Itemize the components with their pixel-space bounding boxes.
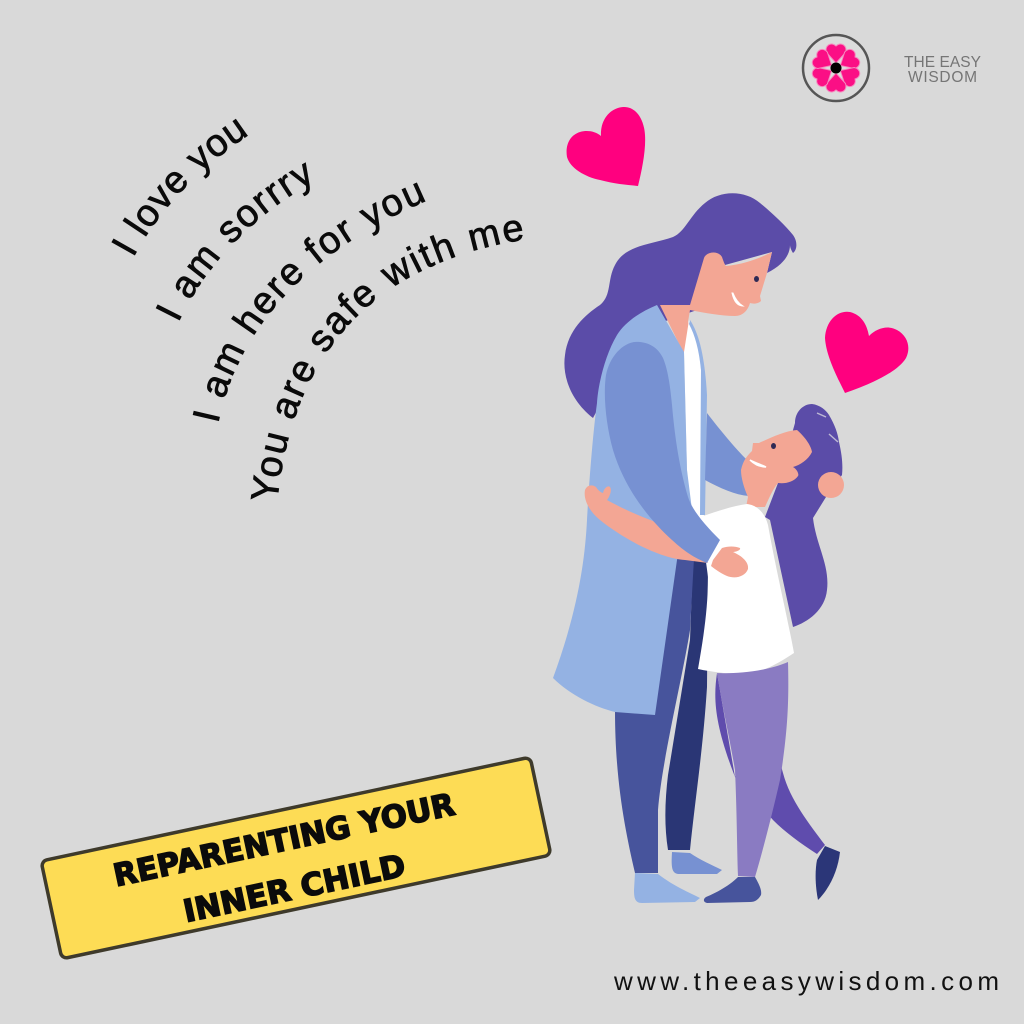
mother back shoe (672, 852, 722, 874)
mother cardigan right flap (689, 320, 707, 515)
curved affirmations text (111, 118, 523, 500)
icon: right heart (825, 312, 908, 393)
mother front leg (615, 558, 694, 873)
banner title text (110, 787, 468, 943)
child ear (818, 472, 844, 498)
mother back leg (665, 558, 708, 850)
mother front sleeve (605, 342, 720, 563)
mother right sleeve (705, 413, 749, 496)
child smile (750, 460, 766, 467)
child back foot (816, 846, 840, 900)
illustration: mother and child hugging (553, 193, 844, 903)
mother smile (732, 293, 743, 306)
logo wordmark: THE EASY (904, 54, 981, 71)
mother front shoe (634, 873, 700, 903)
child hair strand highlights (817, 413, 838, 442)
title banner (41, 757, 551, 959)
icon: flower badge (803, 35, 869, 101)
mother skin: face and neck (660, 252, 772, 352)
mother hand (711, 546, 748, 577)
affirmation: I love you: I love you (111, 118, 248, 256)
child face (741, 430, 812, 507)
child arm hugging mother (585, 485, 708, 563)
icon: top heart (567, 107, 645, 186)
affirmation: I am sorrry: I am sorrry (156, 162, 310, 320)
child eye (771, 443, 776, 449)
affirmation: You are safe with me: You are safe with me (250, 220, 523, 500)
affirmation: I am here for you: I am here for you (192, 182, 426, 422)
mother hair (564, 193, 796, 418)
logo wordmark: WISDOM (908, 69, 977, 86)
child white top (698, 504, 794, 674)
mother white shirt (684, 320, 704, 520)
child hair (765, 404, 842, 627)
line 2: INNER CHILD (180, 848, 409, 930)
child front leg (717, 662, 788, 877)
mother cardigan (553, 305, 692, 715)
yellow plate (41, 757, 551, 959)
line 1: REPARENTING YOUR (110, 787, 458, 894)
website url: www.theeasywisdom.com (613, 966, 999, 996)
logo: the easy wisdom (803, 35, 981, 101)
mother eye (754, 276, 759, 282)
child back leg (715, 673, 825, 854)
child front foot (704, 877, 761, 903)
